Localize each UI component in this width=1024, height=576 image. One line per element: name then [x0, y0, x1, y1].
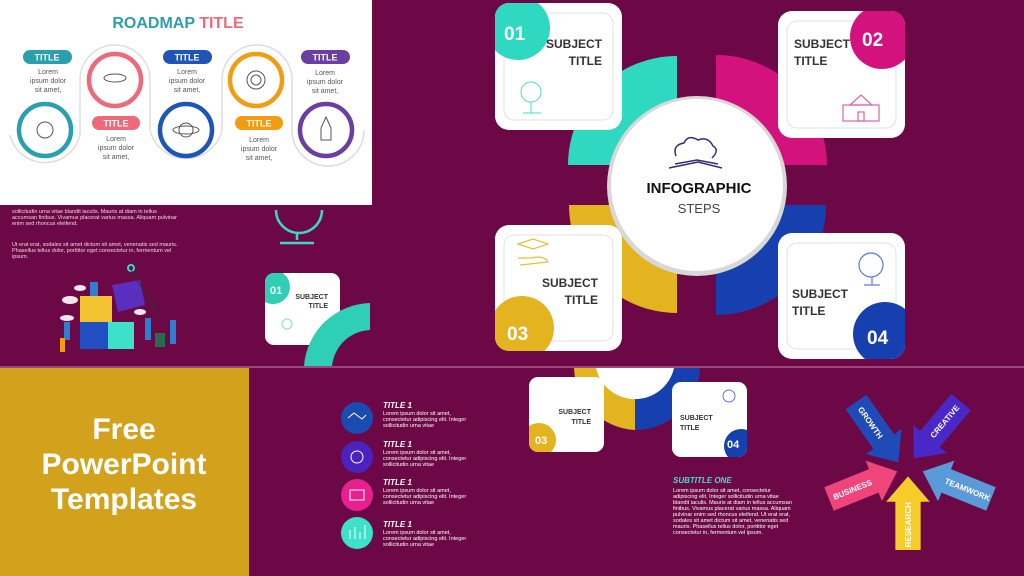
roadmap pills: TITLE [34, 52, 60, 62]
panel: free powerpoint templates: Templates [51, 483, 197, 516]
list: icon items: TITLE 1 [383, 520, 412, 529]
center circle [607, 96, 787, 276]
card small 04: TITLE [680, 425, 700, 432]
roadmap pills: TITLE [174, 52, 200, 62]
roadmap texts: Lorem [106, 136, 126, 143]
roadmap track [10, 45, 364, 166]
card 03 [495, 225, 622, 351]
roadmap texts: Lorem [177, 69, 197, 76]
card 02 [778, 11, 905, 138]
card small 03: 03 [535, 435, 547, 447]
icon: globe partial [276, 210, 322, 243]
panel: free powerpoint templates: PowerPoint [41, 448, 207, 481]
panel: infographic steps [486, 0, 917, 366]
card 01 [486, 0, 622, 130]
card small 04: 04 [727, 439, 740, 451]
roadmap texts: sit amet, [103, 154, 129, 161]
roadmap texts: Lorem [38, 69, 58, 76]
roadmap texts: sit amet, [312, 88, 338, 95]
arrow: creative [897, 388, 978, 472]
roadmap texts: sit amet, [174, 87, 200, 94]
list: icon items: sollicitudin urna vitae [383, 462, 434, 468]
panel: roadmap [0, 0, 372, 205]
list: icon items: consectetur adipiscing elit. Integer [383, 536, 466, 542]
card 02: TITLE [794, 54, 827, 68]
text block: subtitle one: SUBTITLE ONE [673, 476, 732, 485]
text block: subtitle one [673, 476, 792, 536]
arrow: growth: GROWTH [856, 405, 885, 441]
list: icon items: sollicitudin urna vitae [383, 423, 434, 429]
card small 04: SUBJECT [680, 415, 713, 422]
panel: bottom steps partial [529, 368, 747, 457]
text block: subtitle one: consectetur in, fermentum vel ipsum. [673, 530, 763, 536]
list: icon items: Lorem ipsum dolor sit amet, [383, 411, 451, 417]
card 02: 02 [862, 30, 883, 51]
card 01: SUBJECT [546, 37, 603, 51]
list: icon items: TITLE 1 [383, 478, 412, 487]
card 03: TITLE [565, 293, 598, 307]
text block: left paragraphs: enim sed rhoncus eleifend. [12, 221, 78, 227]
card 02: SUBJECT [794, 37, 851, 51]
roadmap pills: TITLE [246, 118, 272, 128]
roadmap texts: sit amet, [35, 87, 61, 94]
text block: subtitle one: pulvinar enim sed rhoncus eleifend. Ut erat erat, [673, 512, 791, 518]
arrow: research: RESEARCH [904, 502, 913, 547]
list: icon items: TITLE 1 [383, 401, 412, 410]
text block: subtitle one: blandit iaculis. Mauris at diam in tellus accumsan [673, 500, 792, 506]
card: small 01: 01 [270, 285, 282, 297]
card 03: 03 [507, 324, 528, 345]
list: icon items: sollicitudin urna vitae [383, 500, 434, 506]
card 03: SUBJECT [542, 276, 599, 290]
card 04: 04 [867, 328, 889, 349]
roadmap pills: TITLE [104, 118, 128, 128]
text block: subtitle one: sodales sit amet dictum sit amet, venenatis sed [673, 518, 788, 524]
text block: left paragraphs: ipsum. [12, 254, 29, 260]
roadmap rings [19, 54, 352, 156]
list: icon items: Lorem ipsum dolor sit amet, [383, 488, 451, 494]
roadmap texts: Lorem [249, 137, 269, 144]
card 04: SUBJECT [792, 287, 849, 301]
roadmap texts [30, 69, 344, 162]
center circle: INFOGRAPHIC [646, 180, 752, 197]
text block: subtitle one: Lorem ipsum dolor sit amet, consectetur [673, 488, 771, 494]
roadmap texts: Lorem [315, 70, 335, 77]
arrow: creative: CREATIVE [929, 403, 962, 440]
card small 04 [672, 382, 747, 457]
list: icon items: TITLE 1 [383, 440, 412, 449]
roadmap texts: ipsum dolor [241, 146, 278, 153]
list: icon items [341, 401, 466, 549]
roadmap texts: ipsum dolor [98, 145, 135, 152]
arrow: teamwork: TEAMWORK [943, 477, 992, 503]
list: icon items: consectetur adipiscing elit. Integer [383, 456, 466, 462]
text block: left paragraphs [12, 209, 178, 260]
roadmap texts: sit amet, [246, 155, 272, 162]
arrow: research [886, 476, 930, 550]
card 04 [778, 233, 905, 359]
card: small 01: SUBJECT [295, 294, 329, 301]
list: icon items: sollicitudin urna vitae [383, 542, 434, 548]
list: icon items: consectetur adipiscing elit. Integer [383, 417, 466, 423]
center circle: STEPS [678, 201, 721, 216]
card small 03: TITLE [572, 419, 591, 426]
arc quadrants [568, 55, 827, 315]
list: icon items: Lorem ipsum dolor sit amet, [383, 450, 451, 456]
card 01: TITLE [569, 54, 602, 68]
panel: free powerpoint templates: Free [92, 413, 156, 446]
illustration: teamwork puzzle [60, 265, 176, 352]
text block: subtitle one: adipiscing elit. Integer sollicitudin urna vitae [673, 494, 779, 500]
card: small 01: TITLE [309, 303, 328, 310]
card 04: TITLE [792, 304, 825, 318]
card: small 01 [265, 273, 340, 345]
text block: subtitle one: mauris. Phasellus tellus dolor, porttitor eget [673, 524, 779, 530]
roadmap title: ROADMAP TITLE [112, 15, 244, 32]
card 01: 01 [504, 24, 526, 45]
text block: left paragraphs: Ut erat erat, sodales sit amet dictum sit amet, venenatis sed mauris. [12, 242, 178, 248]
roadmap pills: TITLE [312, 52, 338, 62]
list: icon items: consectetur adipiscing elit. Integer [383, 494, 466, 500]
roadmap texts: ipsum dolor [169, 78, 206, 85]
roadmap pills [23, 50, 350, 130]
arrow: teamwork [915, 451, 999, 519]
arrow: business [821, 451, 905, 519]
text block: left paragraphs: sollicitudin urna vitae blandit iaculis. Mauris at diam in tellus [12, 209, 157, 215]
roadmap texts: ipsum dolor [307, 79, 344, 86]
arrow: growth [838, 389, 916, 475]
icon: book and cloud [669, 138, 722, 168]
list: icon items: Lorem ipsum dolor sit amet, [383, 530, 451, 536]
card small 03: SUBJECT [558, 409, 592, 416]
arrow: business: BUSINESS [832, 478, 874, 502]
text block: left paragraphs: Phasellus tellus dolor, porttitor eget consectetur in, fermentum vel [12, 248, 171, 254]
card small 03 [529, 377, 604, 452]
text block: subtitle one: finibus. Vivamus placerat varius massa. Aliquam [673, 506, 791, 512]
text block: left paragraphs: accumsan finibus. Vivamus placerat varius massa. Aliquam pulvinar [12, 215, 177, 221]
arrows diagram [821, 388, 999, 550]
panel: free powerpoint templates [0, 368, 249, 576]
roadmap texts: ipsum dolor [30, 78, 67, 85]
arc: small teal [304, 303, 370, 366]
